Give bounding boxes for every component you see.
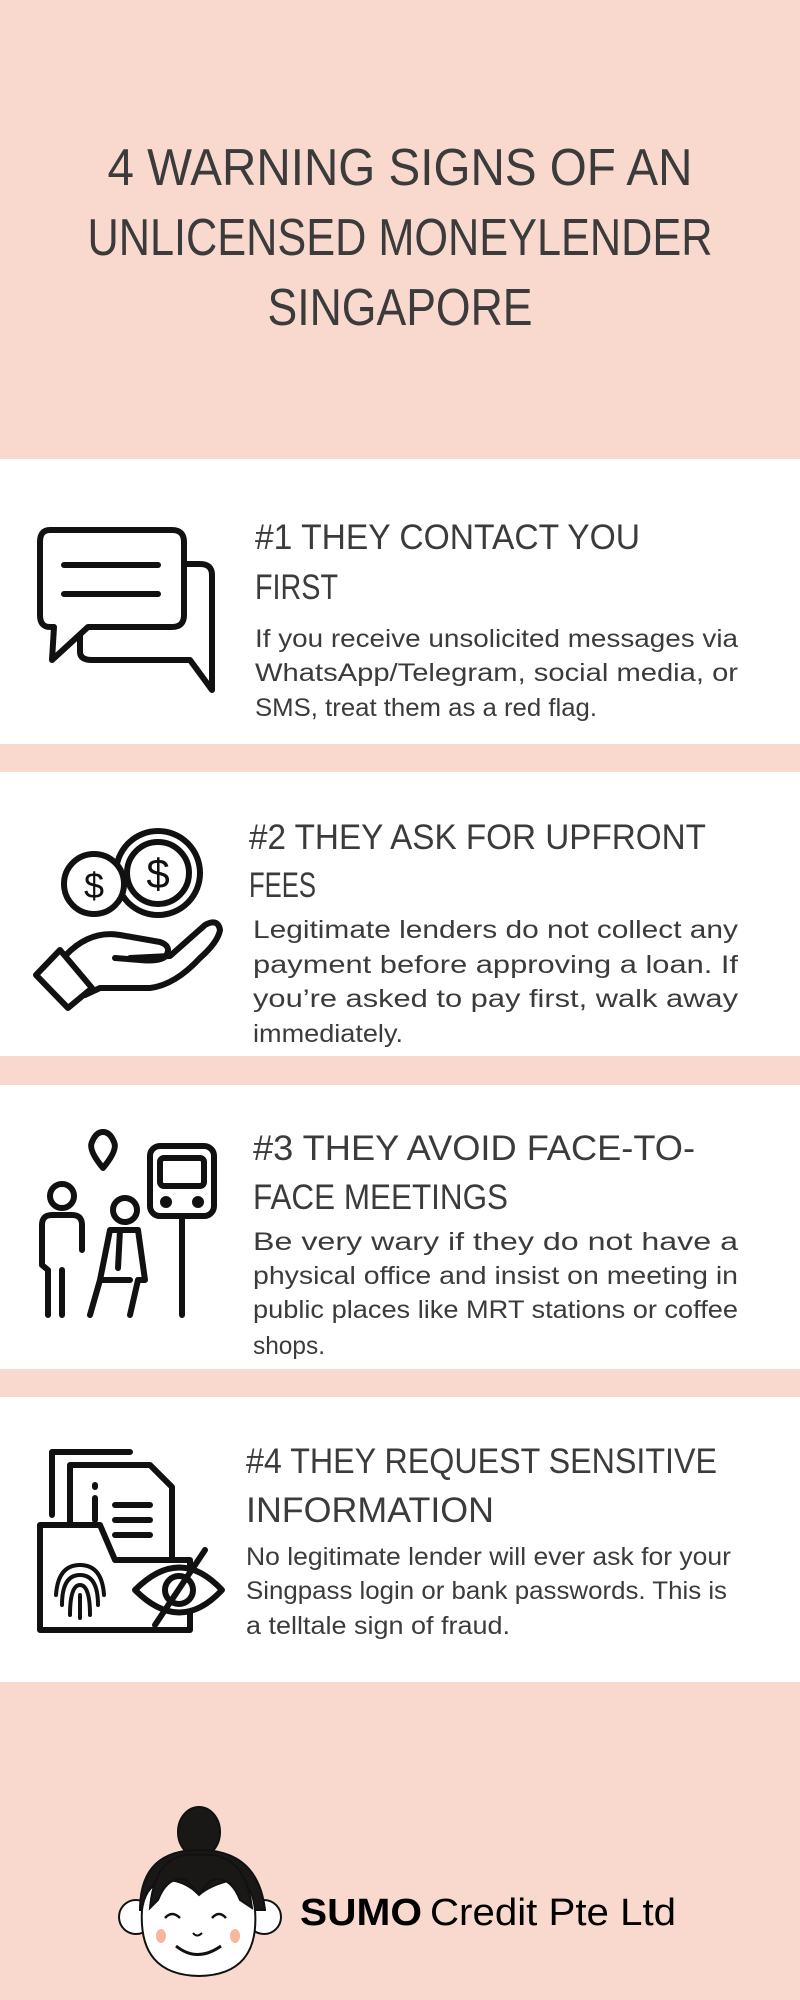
- panel: sign 4: [0, 1397, 800, 1682]
- body: sign 4: a telltale sign of fraud.: [246, 1612, 510, 1640]
- body: sign 3: shops.: [253, 1332, 325, 1360]
- body: sign 2: Legitimate lenders do not collect any: [253, 916, 739, 944]
- body: sign 2: [253, 916, 739, 1048]
- title: SINGAPORE: [268, 279, 532, 337]
- heading: sign 1: [255, 518, 640, 607]
- body: sign 2: payment before approving a loan. If: [253, 951, 738, 979]
- title: 4 WARNING SIGNS OF AN: [108, 139, 692, 197]
- icon: coins and hand: $: [146, 850, 170, 897]
- panel: sign 2: [0, 772, 800, 1056]
- heading: sign 1: FIRST: [255, 568, 338, 607]
- heading: sign 1: #1 THEY CONTACT YOU: [255, 518, 640, 557]
- logo text: Credit Pte Ltd: [430, 1892, 676, 1934]
- icon: coins and hand: $: [84, 865, 104, 906]
- title: [88, 139, 712, 337]
- body: sign 3: [253, 1228, 738, 1360]
- logo text: SUMO: [300, 1892, 422, 1934]
- icon: chat bubbles: [40, 530, 212, 690]
- body: sign 3: Be very wary if they do not have a: [253, 1228, 738, 1256]
- heading: sign 3: #3 THEY AVOID FACE-TO-: [253, 1129, 695, 1168]
- body: sign 2: you’re asked to pay first, walk away: [253, 985, 739, 1013]
- heading: sign 4: #4 THEY REQUEST SENSITIVE: [246, 1442, 717, 1481]
- body: sign 3: public places like MRT stations or coffee: [253, 1296, 738, 1324]
- heading: sign 2: FEES: [249, 866, 316, 905]
- logo text: [300, 1892, 676, 1934]
- icon: documents, fingerprint, eye: [40, 1452, 222, 1630]
- logo: sumo face: [119, 1807, 281, 1976]
- panel: sign 1: [0, 459, 800, 744]
- body: sign 4: No legitimate lender will ever ask for your: [246, 1543, 731, 1571]
- heading: sign 4: [246, 1442, 717, 1530]
- heading: sign 4: INFORMATION: [246, 1491, 494, 1530]
- body: sign 3: physical office and insist on meeting in: [253, 1262, 738, 1290]
- icon: coins and hand: [36, 831, 220, 1008]
- body: sign 4: Singpass login or bank passwords. This is: [246, 1577, 727, 1605]
- body: sign 1: If you receive unsolicited messages via: [255, 625, 738, 653]
- body: sign 1: SMS, treat them as a red flag.: [255, 694, 597, 722]
- heading: sign 3: FACE MEETINGS: [253, 1178, 508, 1217]
- body: sign 2: immediately.: [253, 1020, 403, 1048]
- body: sign 1: [255, 625, 738, 722]
- heading: sign 2: [249, 818, 706, 905]
- panel: sign 3: [0, 1085, 800, 1369]
- body: sign 4: [246, 1543, 731, 1640]
- icon: people at bus stop: [42, 1132, 214, 1315]
- heading: sign 3: [253, 1129, 695, 1217]
- body: sign 1: WhatsApp/Telegram, social media, or: [255, 659, 738, 687]
- heading: sign 2: #2 THEY ASK FOR UPFRONT: [249, 818, 706, 857]
